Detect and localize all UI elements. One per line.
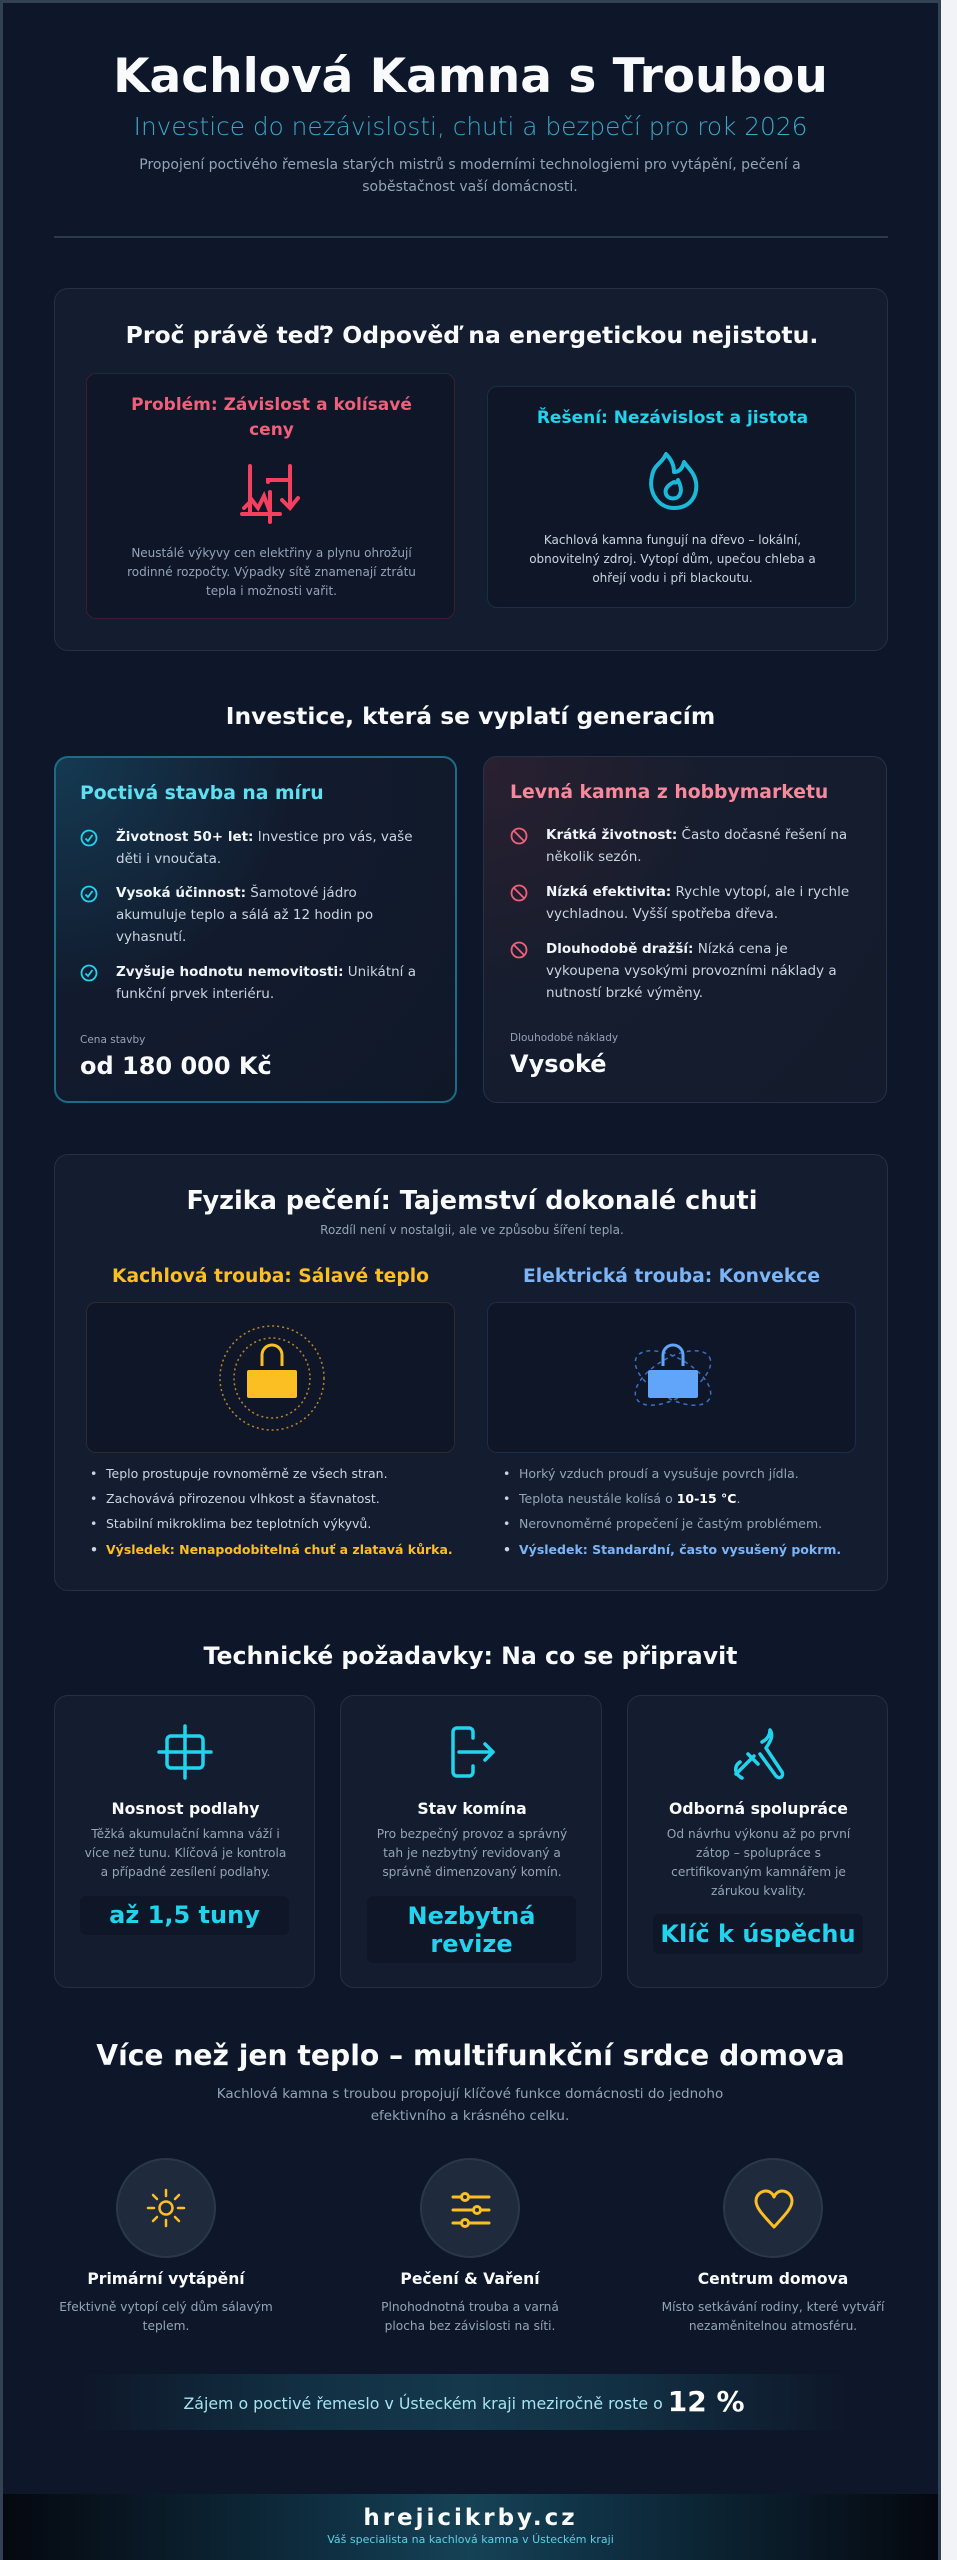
feature: home centre (662, 2158, 885, 2333)
list: convection facts: Výsledek: Standardní, často vysušený pokrm. (519, 1542, 841, 1557)
chimney text: tah je nezbytný revidovaný a (383, 1846, 561, 1860)
card: custom build (54, 756, 457, 1103)
expert text: certifikovaným kamnářem je (671, 1865, 846, 1879)
list: radiant facts: Zachovává přirozenou vlhkost a šťavnatost. (106, 1491, 380, 1506)
card: solution (487, 386, 856, 608)
icon: sun (116, 2158, 216, 2258)
problem heading: Problém: Závislost a kolísavé ceny (131, 395, 412, 440)
box: radiant illustration (86, 1302, 455, 1453)
list: drawbacks: Dlouhodobě dražší: Nízká cena je (546, 941, 788, 957)
chimney value: Nezbytná revize (408, 1902, 535, 1958)
home label: Centrum domova (698, 2270, 848, 2288)
heating label: Primární vytápění (87, 2270, 245, 2288)
list: benefits: vyhasnutí. (116, 929, 186, 945)
icon: floor grid (157, 1724, 213, 1780)
list: benefits: Životnost 50+ let: Investice pro vás, vaše děti i vnoučata. (116, 829, 413, 867)
icon: flame (649, 452, 698, 510)
multifunctional intro: Kachlová kamna s troubou propojují klíčové funkce domácnosti do jednoho efektivního a krásného celku. (217, 2086, 723, 2124)
intro text: Propojení poctivého řemesla starých mistrů s moderními technologiemi pro vytápění, pečení a soběstačnost vaší domácnosti. (139, 157, 801, 195)
list: radiant facts: Teplo prostupuje rovnoměrně ze všech stran. (106, 1466, 388, 1481)
physics subtitle: Rozdíl není v nostalgii, ale ve způsobu šíření tepla. (320, 1223, 624, 1237)
panel: baking physics (54, 1154, 888, 1591)
icon: radiant oven (219, 1325, 325, 1431)
heading: why now: Proč právě teď? Odpověď na energetickou nejistotu. (126, 321, 818, 349)
icon: tools (734, 1728, 784, 1780)
chimney text: Pro bezpečný provoz a správný (377, 1827, 567, 1841)
list: benefits: Vysoká účinnost: Šamotové jádro (116, 885, 357, 901)
icon: chimney exit (451, 1726, 495, 1778)
list: convection facts (504, 1466, 841, 1557)
list: convection facts: Teplota neustále kolísá o 10-15 °C. (519, 1491, 740, 1506)
baking label: Pečení & Vaření (400, 2270, 540, 2288)
card: expert cooperation (627, 1695, 888, 1988)
footer (3, 2494, 938, 2560)
list: radiant facts: Stabilní mikroklima bez teplotních výkyvů. (106, 1516, 371, 1531)
floor text: a případné zesílení podlahy. (101, 1865, 270, 1879)
expert text: zátop – spolupráce s (696, 1846, 821, 1860)
custom heading: Poctivá stavba na míru (80, 783, 324, 804)
callout: growth stat (80, 2374, 848, 2430)
list: drawbacks: vykoupena vysokými provozními náklady a (546, 963, 837, 979)
list: benefits (80, 828, 416, 1002)
list: benefits: akumuluje teplo a sálá až 12 hodin po (116, 907, 373, 923)
chimney text (377, 1827, 567, 1879)
heading: multifunctional: Více než jen teplo – multifunkční srdce domova (96, 2039, 845, 2072)
list: drawbacks (510, 826, 849, 1001)
subtitle: Investice do nezávislosti, chuti a bezpečí pro rok 2026 (134, 112, 807, 141)
baking text: Plnohodnotná trouba a varná plocha bez závislosti na síti. (381, 2300, 559, 2333)
icon: fluctuating prices (240, 464, 300, 524)
card: problem (86, 373, 455, 619)
expert heading: Odborná spolupráce (669, 1799, 848, 1818)
cost value: Vysoké (510, 1050, 607, 1078)
floor text: Těžká akumulační kamna váží i (91, 1827, 280, 1841)
feature: heating (59, 2158, 273, 2333)
price value: od 180 000 Kč (80, 1052, 272, 1080)
footer tagline: Váš specialista na kachlová kamna v Ústeckém kraji (327, 2533, 614, 2546)
cheap heading: Levná kamna z hobbymarketu (510, 782, 828, 803)
heating text: Efektivně vytopí celý dům sálavým teplem. (59, 2300, 273, 2333)
floor text (85, 1827, 286, 1879)
list: drawbacks: Nízká efektivita: Rychle vytopí, ale i rychle vychladnou. Vyšší spotřeba dřeva. (546, 884, 849, 922)
floor heading: Nosnost podlahy (111, 1799, 260, 1818)
column heading: radiant: Kachlová trouba: Sálavé teplo (112, 1266, 429, 1287)
footer brand: hrejicikrby.cz (363, 2505, 578, 2531)
problem text: Neustálé výkyvy cen elektřiny a plynu ohrožují rodinné rozpočty. Výpadky sítě znamenají ztrátu tepla i možnosti vařit. (127, 546, 416, 598)
solution text: Kachlová kamna fungují na dřevo – lokální, obnovitelný zdroj. Vytopí dům, upečou chleba a ohřejí vodu i při blackoutu. (529, 533, 816, 585)
floor value (80, 1896, 289, 1935)
floor value: až 1,5 tuny (109, 1901, 260, 1929)
list: convection facts: Nerovnoměrné propečení je častým problémem. (519, 1516, 822, 1531)
expert text (667, 1827, 850, 1898)
expert value: Klíč k úspěchu (660, 1920, 856, 1948)
icon: sliders (420, 2158, 520, 2258)
box: convection illustration (487, 1302, 856, 1453)
floor text: více než tunu. Klíčová je kontrola (85, 1846, 286, 1860)
card: cheap stoves (483, 756, 887, 1103)
home text: Místo setkávání rodiny, které vytváří nezaměnitelnou atmosféru. (662, 2300, 884, 2333)
chimney heading: Stav komína (417, 1799, 527, 1818)
list: radiant facts (92, 1466, 453, 1557)
solution heading: Řešení: Nezávislost a jistota (537, 408, 808, 428)
title: Kachlová Kamna s Troubou (113, 49, 828, 104)
list: radiant facts: Výsledek: Nenapodobitelná chuť a zlatavá kůrka. (106, 1542, 453, 1557)
price label: Cena stavby (80, 1034, 145, 1046)
list: drawbacks: Krátká životnost: Často dočasné řešení na několik sezón. (546, 827, 847, 865)
icon: convection oven (634, 1344, 712, 1406)
cost label: Dlouhodobé náklady (510, 1032, 618, 1044)
heading: technical requirements: Technické požadavky: Na co se připravit (204, 1642, 737, 1670)
expert value (653, 1914, 863, 1954)
list: drawbacks: nutností brzké výměny. (546, 985, 703, 1001)
expert text: Od návrhu výkonu až po první (667, 1827, 850, 1841)
heading: investment: Investice, která se vyplatí generacím (226, 702, 715, 730)
icon: heart (723, 2158, 823, 2258)
physics heading: Fyzika pečení: Tajemství dokonalé chuti (187, 1186, 757, 1216)
panel: why now (54, 288, 888, 651)
feature: baking (381, 2158, 559, 2333)
expert text: zárukou kvality. (711, 1884, 806, 1898)
card: floor load (54, 1695, 315, 1988)
list: benefits: Zvyšuje hodnotu nemovitosti: Unikátní a funkční prvek interiéru. (116, 964, 416, 1002)
card: chimney (340, 1695, 602, 1988)
column heading: convection: Elektrická trouba: Konvekce (523, 1266, 820, 1287)
chimney value (367, 1896, 576, 1963)
callout: growth stat: Zájem o poctivé řemeslo v Ústeckém kraji meziročně roste o 12 % (183, 2385, 745, 2418)
chimney text: správně dimenzovaný komín. (382, 1865, 562, 1879)
list: convection facts: Horký vzduch proudí a vysušuje povrch jídla. (519, 1466, 799, 1481)
